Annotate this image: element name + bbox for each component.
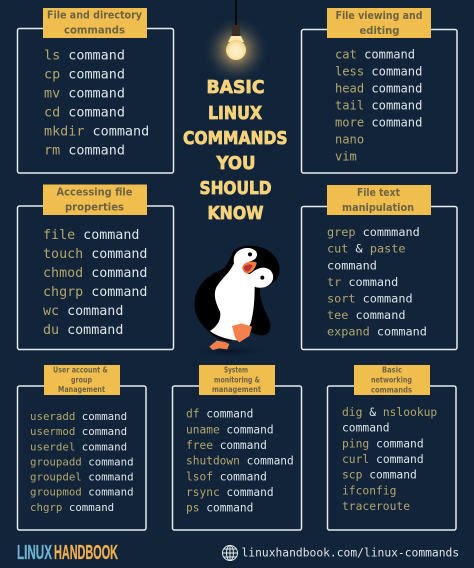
website url: linuxhandbook.com/linux-commands	[242, 547, 459, 560]
command list: uname command	[186, 423, 274, 436]
command list	[186, 408, 294, 515]
heading: file and directory commands	[43, 8, 147, 38]
command list	[327, 225, 427, 339]
command list: userdel command	[30, 440, 127, 453]
command list: free command	[186, 439, 267, 452]
heading: system monitoring and management	[199, 365, 275, 395]
command list: du command	[43, 323, 123, 338]
command list: dig & nslookup	[342, 406, 437, 419]
command list: useradd command	[30, 410, 127, 423]
command list: mv command	[44, 86, 125, 101]
heading: basic networking commands: commands	[371, 386, 412, 394]
command list: traceroute	[342, 500, 410, 513]
command list: grep commmand	[327, 225, 420, 239]
heading: file viewing and editing: File viewing and	[336, 10, 422, 22]
heading: file text manipulation: manipulation	[342, 202, 414, 214]
heading: file and directory commands: File and directory	[47, 10, 142, 22]
command list: command	[342, 422, 390, 435]
panel: accessing file properties	[18, 184, 174, 350]
icon: globe	[222, 546, 238, 560]
command list	[43, 228, 147, 338]
command list: cut & paste	[327, 242, 405, 256]
command list	[30, 410, 134, 514]
panel: file text manipulation	[302, 185, 457, 350]
panel: system monitoring and management	[172, 365, 302, 530]
heading: user account and group management: Management	[58, 385, 105, 394]
heading: user account and group management: User account &	[53, 366, 108, 374]
heading: accessing file properties: properties	[65, 202, 124, 214]
logo: Linux Handbook: LINUX	[17, 541, 52, 564]
command list: ping command	[342, 437, 424, 450]
title: SHOULD	[200, 178, 272, 199]
command list: tr command	[327, 275, 398, 289]
command list: head command	[335, 81, 422, 95]
command list: vim	[335, 149, 357, 163]
command list: lsof command	[186, 470, 267, 483]
panel: file and directory commands	[18, 8, 174, 173]
command list: df command	[186, 408, 253, 421]
command list: usermod command	[30, 425, 127, 438]
heading: system monitoring and management: management	[212, 385, 261, 394]
title	[183, 77, 288, 224]
heading: basic networking commands: networking	[371, 376, 412, 384]
command list: cat command	[335, 47, 415, 61]
panel: basic networking commands	[328, 365, 456, 530]
command list: chmod command	[43, 266, 147, 281]
command list: groupadd command	[30, 455, 134, 468]
command list: ls command	[44, 48, 125, 63]
heading: accessing file properties	[43, 184, 147, 215]
command list: nano	[335, 132, 364, 146]
title: KNOW	[208, 203, 264, 224]
command list: tee command	[327, 308, 405, 322]
command list	[335, 47, 422, 163]
command list: cd command	[44, 105, 125, 120]
icon: light bulb	[202, 0, 270, 84]
icon: penguin	[187, 246, 280, 358]
command list	[44, 48, 149, 158]
heading: file viewing and editing: editing	[360, 25, 400, 37]
heading: basic networking commands	[354, 365, 430, 395]
command list: file command	[43, 228, 139, 243]
command list: mkdir command	[44, 124, 149, 139]
command list: less command	[335, 64, 422, 78]
heading: system monitoring and management: monitoring &	[214, 376, 260, 384]
heading: user account and group management	[44, 365, 120, 395]
command list: chgrp command	[43, 285, 147, 300]
heading: file viewing and editing	[327, 8, 431, 38]
command list: groupdel command	[30, 471, 134, 484]
title: YOU	[216, 153, 256, 174]
heading: basic networking commands: Basic	[382, 366, 402, 374]
heading: accessing file properties: Accessing file	[56, 186, 132, 198]
command list: more command	[335, 115, 422, 129]
heading: user account and group management: group	[71, 376, 93, 384]
command list: shutdown command	[186, 455, 294, 468]
command list: curl command	[342, 453, 424, 466]
title: COMMANDS	[183, 128, 288, 149]
command list: tail command	[335, 98, 422, 112]
heading: system monitoring and management: System	[224, 366, 248, 374]
panel: user account and group management	[18, 365, 146, 530]
command list: rm command	[44, 143, 125, 158]
command list: ifconfig	[342, 484, 396, 497]
command list: wc command	[43, 304, 123, 319]
logo: Linux Handbook: HANDBOOK	[54, 541, 118, 564]
command list: expand command	[327, 325, 427, 339]
command list: scp command	[342, 469, 417, 482]
logo: Linux Handbook	[17, 541, 118, 564]
command list: rsync command	[186, 486, 274, 499]
title: LINUX	[208, 103, 262, 124]
command list: chgrp command	[30, 501, 114, 514]
command list: command	[327, 258, 377, 272]
title: BASIC	[206, 77, 264, 98]
command list: ps command	[186, 502, 253, 515]
command list: touch command	[43, 247, 147, 262]
heading: file text manipulation	[327, 185, 431, 215]
command list: groupmod command	[30, 486, 134, 499]
command list: sort command	[327, 292, 413, 306]
command list: cp command	[44, 67, 125, 82]
heading: file and directory commands: commands	[64, 24, 125, 36]
panel: file viewing and editing	[302, 8, 457, 173]
command list	[342, 406, 437, 513]
heading: file text manipulation: File text	[357, 187, 400, 199]
